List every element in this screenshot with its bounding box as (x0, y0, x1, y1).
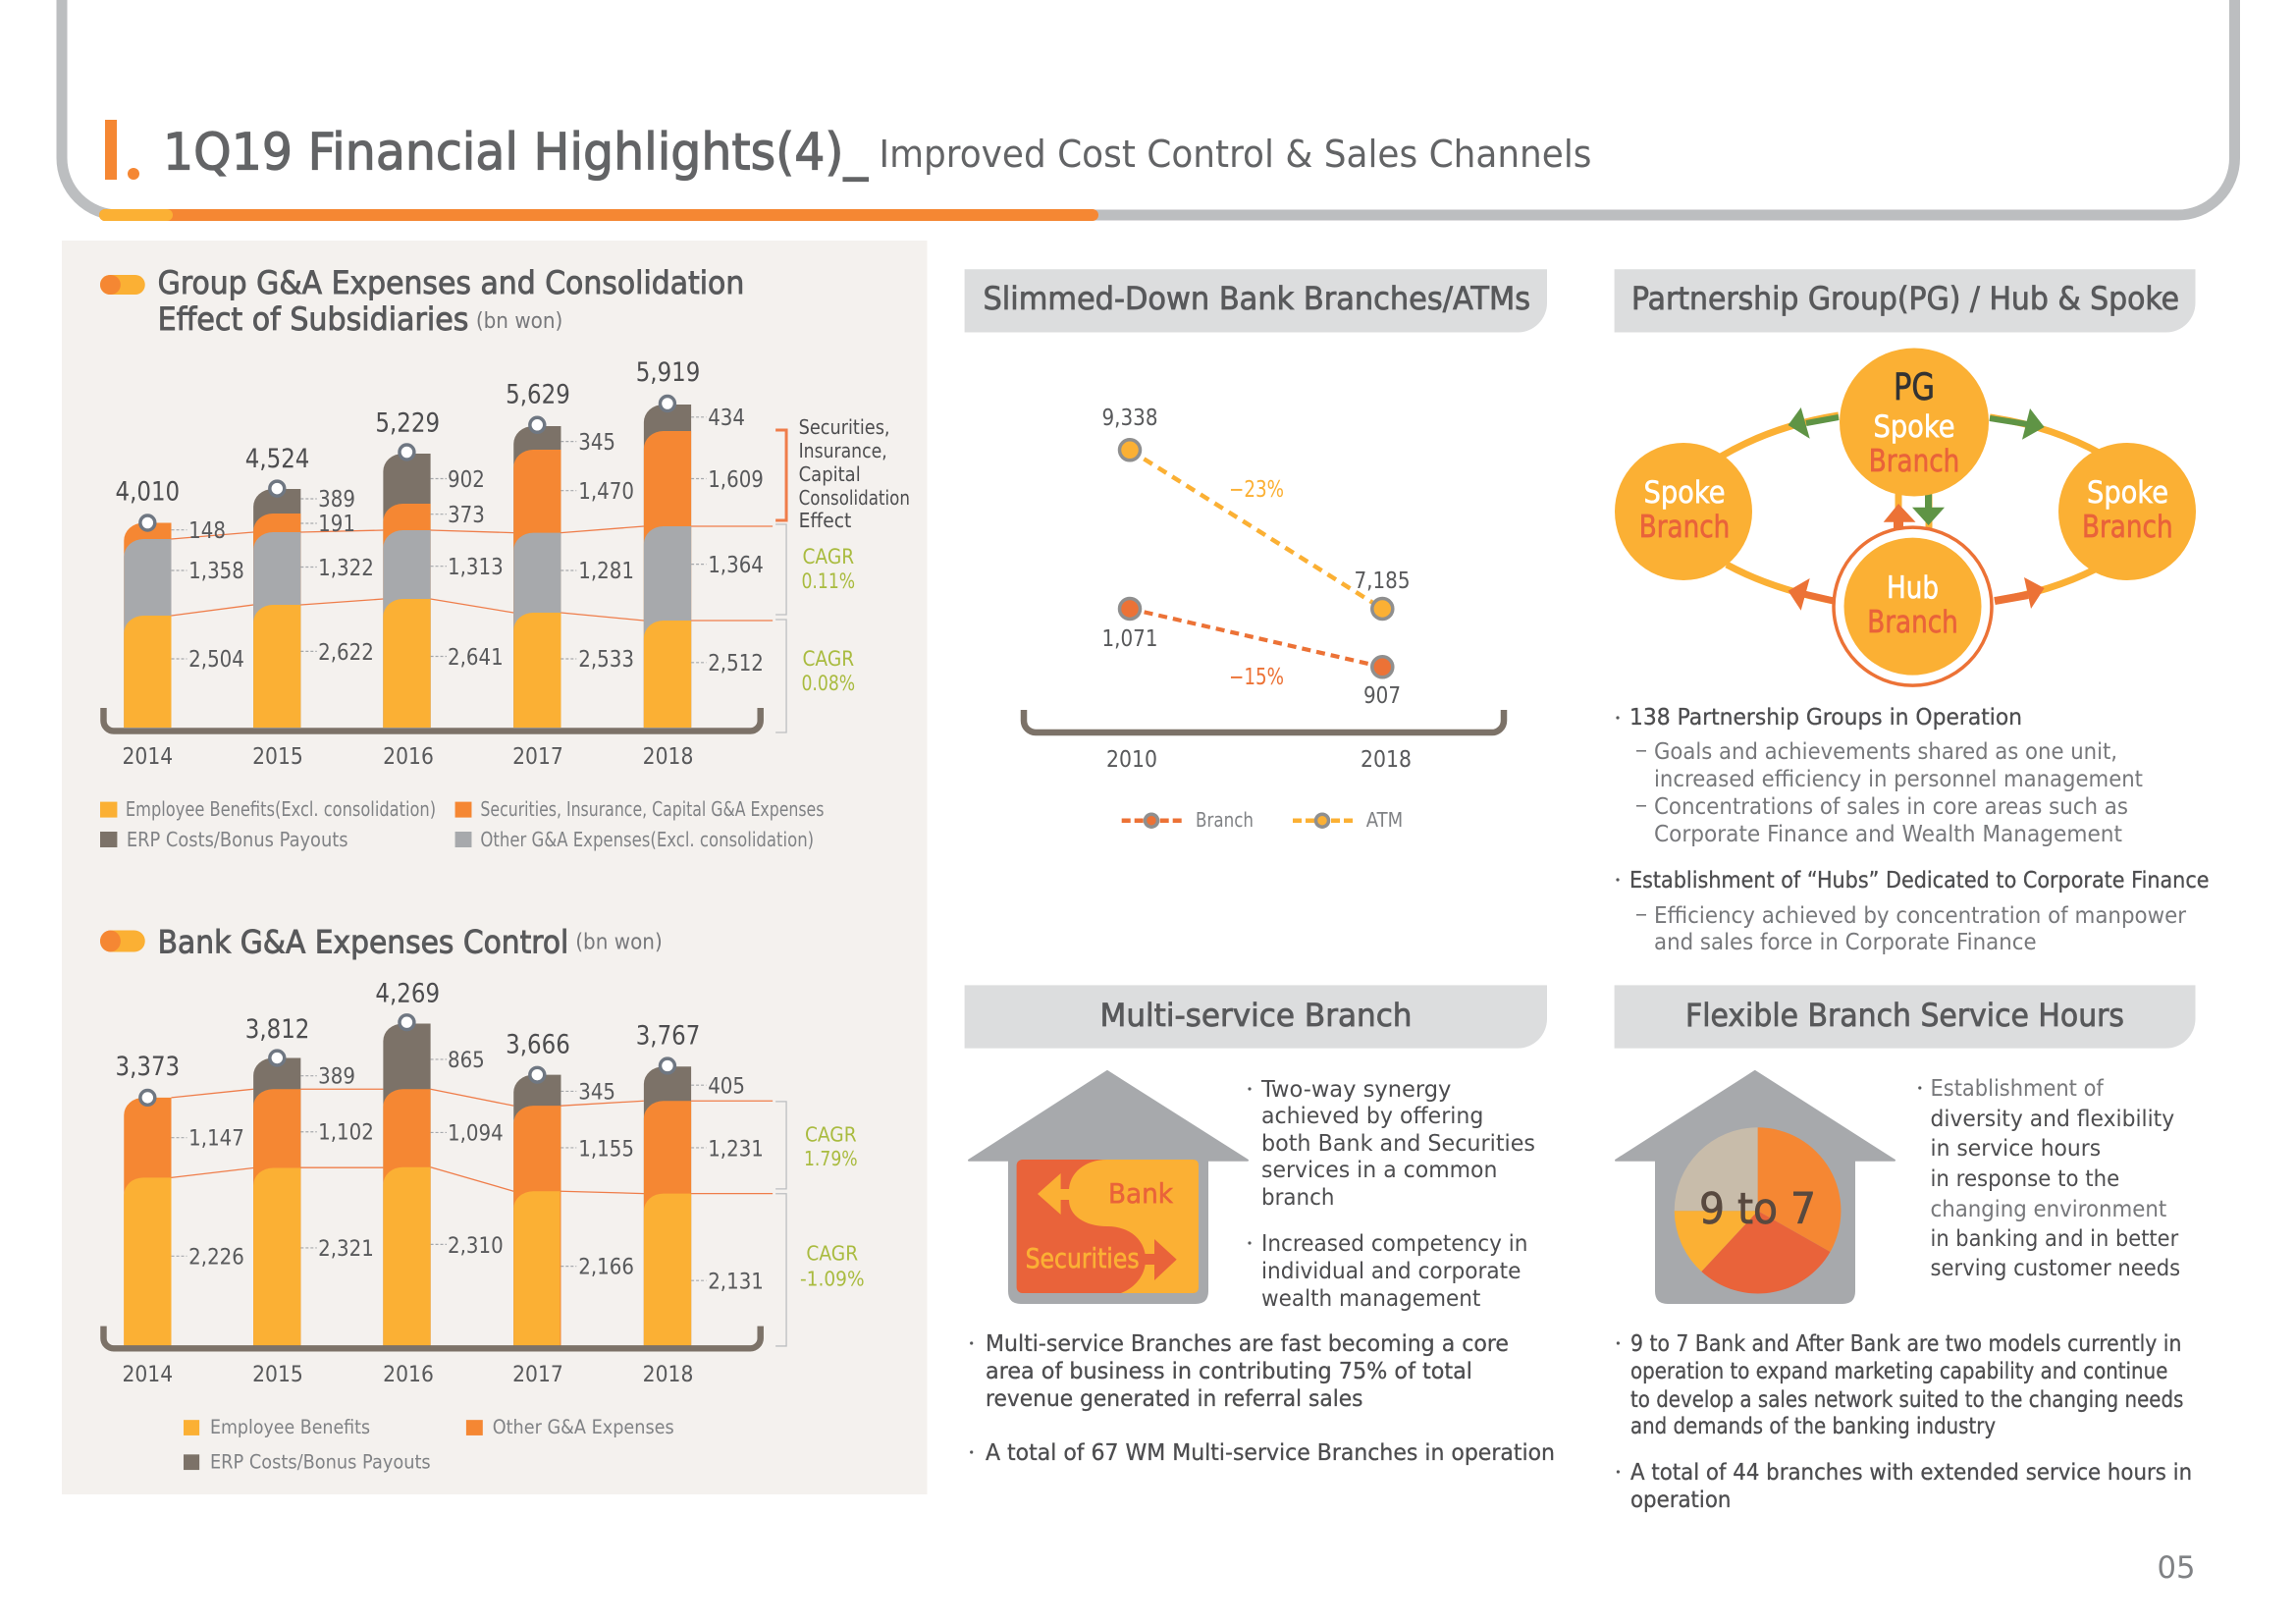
PG circle: Branch (1869, 444, 1959, 479)
heading: group G&A (100, 264, 744, 338)
text block: flexible hours lower bullets: 9 to 7 Bank and After Bank are two models currently in (1630, 1331, 2181, 1357)
values: 1,071 (1101, 626, 1158, 652)
header frame (62, 0, 2234, 221)
text block: multi-service side bullets: both Bank and Securities (1261, 1131, 1535, 1157)
text block: flexible hours side bullets: changing environment (1930, 1197, 2166, 1222)
text block: flexible hours side bullets: Establishment of (1930, 1076, 2105, 1102)
CAGR labels: 1.79% (804, 1147, 858, 1170)
diagram: hub and spoke (1615, 348, 2196, 685)
value labels: 389 (318, 1064, 355, 1090)
value labels: 345 (578, 1079, 615, 1105)
panel heading: multi-service: Multi-service Branch (1099, 997, 1412, 1034)
text block: multi-service side bullets: wealth management (1261, 1286, 1480, 1312)
connector lines (171, 526, 773, 621)
value labels: 2,310 (448, 1233, 504, 1259)
value labels (188, 406, 764, 677)
bar 2018 (644, 397, 691, 728)
value labels: 2,166 (578, 1255, 634, 1279)
text block: partnership bullets: Establishment of “Hubs” Dedicated to Corporate Finance (1629, 868, 2209, 893)
value labels: 865 (448, 1048, 485, 1073)
values (1101, 406, 1412, 773)
legend: group chart (100, 797, 824, 851)
text block: multi-service side bullets: achieved by offering (1261, 1104, 1483, 1129)
legend: ATM (1366, 808, 1403, 832)
left spoke circle: Branch (1639, 510, 1730, 545)
title main text: 1Q19 Financial Highlights(4)_ (163, 124, 869, 183)
left spoke circle: Spoke (1643, 475, 1726, 511)
panel heading: flexible hours (1615, 985, 2195, 1049)
text block: multi-service side bullets (1248, 1077, 1535, 1312)
text block: flexible hours lower bullets (1617, 1331, 2192, 1513)
value labels: 434 (708, 406, 745, 431)
year labels: 2018 (643, 1362, 693, 1387)
year labels: 2014 (122, 744, 173, 770)
white gap (1903, 496, 1919, 520)
CAGR labels: CAGR (802, 647, 854, 671)
orange arrows (1789, 504, 2045, 611)
text block: partnership bullets: Goals and achievements shared as one unit, (1654, 739, 2117, 765)
right spoke circle: Branch (2082, 510, 2173, 545)
year labels: 2016 (383, 1362, 434, 1387)
year labels (122, 744, 693, 770)
consolidation note: Effect (799, 509, 851, 532)
value labels: 148 (188, 518, 226, 544)
text block: flexible hours side bullets: in service hours (1930, 1136, 2101, 1162)
axis bracket (103, 708, 761, 731)
PG circle (1840, 348, 1989, 497)
value labels: 389 (318, 487, 355, 513)
value labels: 1,358 (188, 559, 244, 584)
CAGR labels: CAGR (802, 545, 854, 568)
year labels (122, 1362, 693, 1387)
values: 2010 (1106, 747, 1157, 773)
text block: partnership bullets: increased efficiency in personnel management (1654, 767, 2143, 792)
text block: multi-service side bullets: services in a common (1261, 1158, 1497, 1183)
bar 2016 (383, 1015, 431, 1345)
value labels: 1,313 (448, 555, 504, 580)
values: 7,185 (1355, 568, 1410, 594)
panel heading: slimmed-down: Slimmed-Down Bank Branches/ATMs (984, 280, 1530, 317)
value labels: 191 (318, 512, 355, 537)
CAGR labels: CAGR (805, 1123, 857, 1147)
totals: 4,524 (245, 444, 309, 474)
CAGR labels (801, 545, 855, 695)
consolidation note: Consolidation (799, 486, 910, 510)
value labels: 2,533 (578, 647, 634, 673)
values: −23% (1229, 477, 1284, 503)
consolidation note: Capital (799, 462, 861, 486)
bar 2017 (513, 1067, 561, 1345)
year labels: 2017 (512, 1362, 563, 1387)
text block: multi-service lower bullets: area of business in contributing 75% of total (986, 1359, 1472, 1384)
text block: flexible hours side bullets: serving customer needs (1930, 1256, 2180, 1281)
CAGR labels (800, 1123, 865, 1290)
value labels: 1,147 (188, 1126, 244, 1152)
text block: flexible hours lower bullets: A total of 44 branches with extended service hours in (1630, 1460, 2192, 1486)
text block: multi-service side bullets: Two-way synergy (1260, 1077, 1451, 1103)
branch line (1130, 609, 1382, 667)
totals: 5,629 (506, 379, 570, 410)
value labels: 1,281 (578, 559, 634, 584)
legend: bank chart (184, 1416, 674, 1473)
consolidation note: Insurance, (799, 439, 887, 462)
values: 907 (1363, 683, 1401, 709)
hub circle: Branch (1867, 605, 1958, 640)
totals: 5,919 (636, 357, 700, 388)
values: 2018 (1361, 747, 1412, 773)
value labels: 2,641 (448, 645, 504, 671)
value labels: 1,231 (708, 1136, 764, 1162)
totals: 3,812 (245, 1014, 309, 1045)
left spoke circle (1615, 443, 1752, 580)
text block: partnership bullets: Concentrations of sales in core areas such as (1654, 794, 2128, 820)
value labels: 2,512 (708, 651, 764, 677)
totals: 4,010 (116, 476, 180, 508)
text block: flexible hours lower bullets: and demands of the banking industry (1630, 1414, 1996, 1439)
totals: 3,373 (116, 1052, 180, 1082)
icon: house bank and securities (969, 1071, 1248, 1303)
value labels: 2,321 (318, 1236, 374, 1262)
year labels: 2015 (252, 1362, 303, 1387)
consolidation note (799, 415, 910, 532)
value labels: 405 (708, 1073, 745, 1099)
legend: group chart: ERP Costs/Bonus Payouts (127, 828, 348, 851)
ATM line (1130, 450, 1382, 609)
CAGR labels: 0.11% (801, 569, 855, 593)
value labels: 1,322 (318, 556, 374, 581)
text block: partnership bullets: 138 Partnership Groups in Operation (1629, 705, 2022, 731)
bar 2014 (124, 1091, 171, 1345)
value labels: 1,470 (578, 479, 634, 505)
axis bracket (103, 1326, 761, 1348)
text block: multi-service lower bullets: revenue generated in referral sales (986, 1386, 1362, 1412)
totals: 3,666 (506, 1030, 570, 1059)
year labels: 2014 (122, 1362, 173, 1387)
text block: multi-service lower bullets: A total of 67 WM Multi-service Branches in operation (986, 1440, 1555, 1466)
heading: group G&A: Effect of Subsidiaries (158, 300, 468, 338)
totals (116, 978, 700, 1082)
value labels: 1,155 (578, 1136, 634, 1162)
value labels: 1,609 (708, 467, 764, 493)
text block: flexible hours side bullets (1918, 1076, 2180, 1281)
text block: flexible hours lower bullets: operation (1630, 1488, 1731, 1513)
totals: 4,269 (375, 978, 440, 1008)
text block: multi-service lower bullets (970, 1331, 1555, 1466)
value labels: 2,226 (188, 1245, 244, 1271)
legend: Branch (1196, 808, 1254, 832)
text block: flexible hours lower bullets: operation to expand marketing capability and continue (1630, 1359, 2167, 1384)
text block: flexible hours lower bullets: to develop a sales network suited to the changing needs (1630, 1387, 2183, 1413)
markers (1119, 440, 1393, 677)
year labels: 2016 (383, 744, 434, 770)
value labels: 1,102 (318, 1120, 374, 1146)
CAGR labels: CAGR (806, 1242, 858, 1266)
bar 2015 (253, 481, 300, 728)
connector lines (171, 1089, 773, 1194)
icon: house bank and securities: Bank (1108, 1177, 1174, 1210)
value labels: 373 (448, 503, 485, 528)
ring arcs (1721, 415, 2101, 601)
text block: partnership bullets: Corporate Finance and Wealth Management (1654, 822, 2122, 847)
totals: 3,767 (636, 1021, 700, 1052)
value labels: 902 (448, 467, 485, 493)
panel heading: partnership (1615, 269, 2195, 332)
hub circle: Hub (1887, 570, 1939, 606)
value labels: 345 (578, 430, 615, 456)
value labels: 1,094 (448, 1121, 504, 1147)
totals (116, 357, 700, 508)
values: 9,338 (1101, 406, 1158, 431)
text block: partnership bullets: Efficiency achieved by concentration of manpower (1654, 903, 2187, 929)
heading: group G&A: Group G&A Expenses and Consolidation (158, 264, 744, 301)
icon: house with 9 to 7 pie: 9 to 7 (1699, 1184, 1816, 1234)
value labels: 1,364 (708, 553, 764, 578)
PG circle: PG (1894, 366, 1935, 408)
bar 2015 (253, 1051, 300, 1345)
heading: bank G&A: (bn won) (575, 930, 663, 955)
legend: group chart: Employee Benefits(Excl. consolidation) (126, 797, 436, 821)
text block: partnership bullets: and sales force in Corporate Finance (1654, 930, 2037, 955)
legend: bank chart: Employee Benefits (210, 1416, 370, 1438)
PG circle: Spoke (1873, 409, 1955, 445)
year labels: 2018 (643, 744, 693, 770)
panel heading: slimmed-down (965, 269, 1547, 332)
right spoke circle: Spoke (2087, 475, 2168, 511)
brackets (775, 430, 786, 732)
bar 2018 (644, 1058, 691, 1345)
legend: bank chart: Other G&A Expenses (493, 1416, 674, 1438)
CAGR labels: 0.08% (801, 672, 855, 695)
value labels: 2,622 (318, 640, 374, 666)
text block: multi-service side bullets: Increased competency in (1261, 1231, 1527, 1257)
CAGR labels: -1.09% (800, 1267, 865, 1290)
panel heading: partnership: Partnership Group(PG) / Hub & Spoke (1631, 280, 2179, 317)
bar 2014 (124, 515, 171, 728)
legend: group chart: Securities, Insurance, Capital G&A Expenses (480, 797, 824, 821)
year labels: 2015 (252, 744, 303, 770)
heading: bank G&A: Bank G&A Expenses Control (158, 923, 568, 961)
chart: group G&A stacked bars (103, 357, 910, 770)
text block: flexible hours side bullets: in response to the (1930, 1166, 2119, 1192)
green arrows (1789, 407, 2045, 525)
panel heading: flexible hours: Flexible Branch Service Hours (1685, 997, 2124, 1034)
legend: bank chart: ERP Costs/Bonus Payouts (210, 1450, 431, 1473)
text block: flexible hours side bullets: diversity and flexibility (1930, 1107, 2174, 1132)
icon: house bank and securities: Securities (1026, 1242, 1140, 1274)
line chart: branches and ATMs (1024, 406, 1504, 832)
title (105, 120, 1592, 183)
page number: 05 (2158, 1550, 2195, 1586)
value labels: 2,504 (188, 647, 244, 673)
bar 2016 (383, 445, 431, 728)
legend (1122, 808, 1403, 832)
right spoke circle (2058, 443, 2196, 580)
hub circle (1834, 527, 1992, 685)
legend: group chart: Other G&A Expenses(Excl. consolidation) (480, 828, 814, 851)
axis (1024, 710, 1504, 732)
chart: bank G&A stacked bars (103, 978, 865, 1387)
bar 2017 (513, 417, 561, 728)
panel heading: multi-service (965, 985, 1547, 1049)
icon: house with 9 to 7 pie (1616, 1071, 1895, 1303)
icon: section numeral (105, 120, 139, 180)
value labels (188, 1048, 764, 1294)
text block: multi-service side bullets: individual and corporate (1261, 1259, 1521, 1284)
value labels: 2,131 (708, 1269, 764, 1294)
title subtitle: Improved Cost Control & Sales Channels (880, 133, 1592, 176)
heading: group G&A: (bn won) (476, 309, 562, 334)
text block: multi-service side bullets: branch (1261, 1185, 1334, 1211)
text block: partnership bullets (1616, 705, 2209, 955)
year labels: 2017 (512, 744, 563, 770)
values: −15% (1229, 665, 1284, 690)
totals: 5,229 (375, 407, 440, 439)
panel: left background (62, 241, 927, 1494)
consolidation note: Securities, (799, 415, 890, 439)
text block: multi-service lower bullets: Multi-service Branches are fast becoming a core (986, 1331, 1509, 1357)
text block: flexible hours side bullets: in banking and in better (1930, 1226, 2179, 1252)
